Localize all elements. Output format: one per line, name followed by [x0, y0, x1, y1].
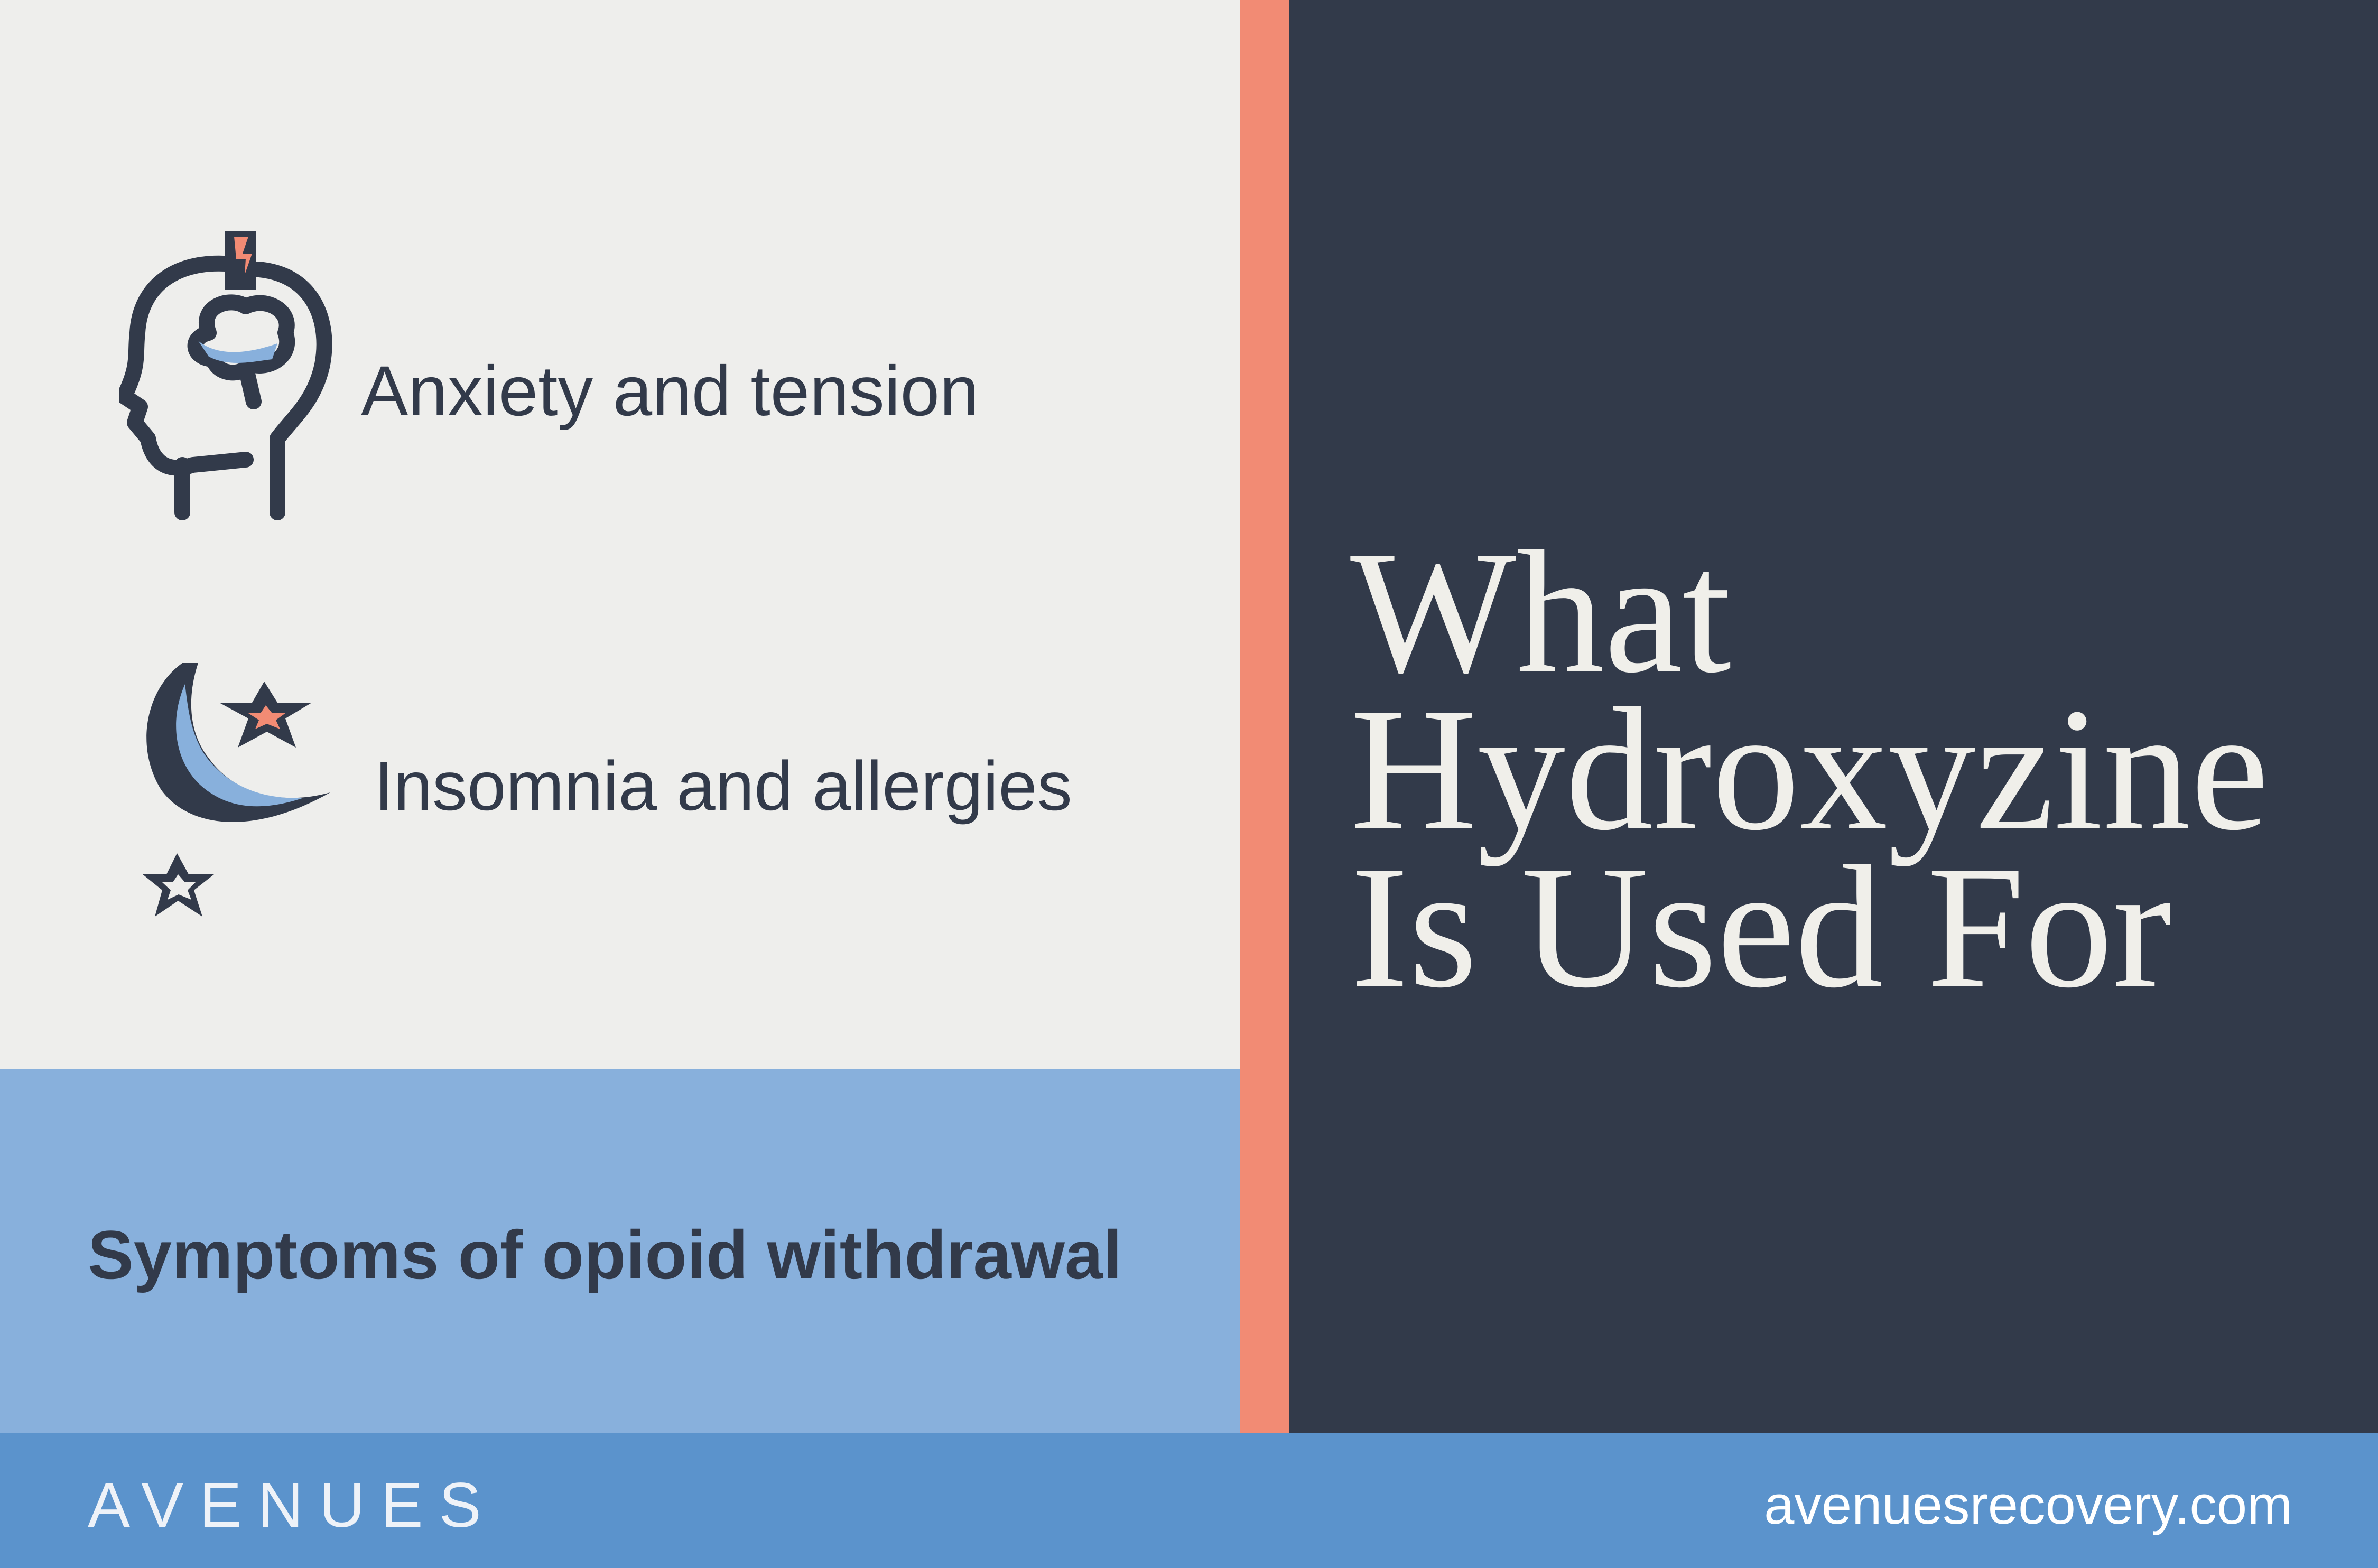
title: What — [1350, 515, 1731, 710]
footer url: avenuesrecovery.com — [1764, 1474, 2292, 1535]
title: Hydroxyzine — [1350, 672, 2269, 867]
footer bar — [0, 1433, 2378, 1568]
logo: AVENUES: AVENUES — [88, 1470, 497, 1541]
label: opioid withdrawal: Symptoms of opioid withdrawal — [88, 1216, 1122, 1293]
panel: dark right — [1279, 0, 2378, 1433]
icon: head with brain — [119, 231, 332, 520]
title — [1350, 515, 2269, 1024]
icon: moon and stars — [143, 663, 330, 917]
label: anxiety: Anxiety and tension — [361, 352, 979, 431]
panel: light left — [0, 0, 1252, 1069]
panel: blue band — [0, 1069, 1252, 1433]
divider stripe: coral — [1240, 0, 1289, 1433]
title: Is Used For — [1350, 829, 2171, 1024]
label: insomnia: Insomnia and allergies — [374, 747, 1072, 825]
